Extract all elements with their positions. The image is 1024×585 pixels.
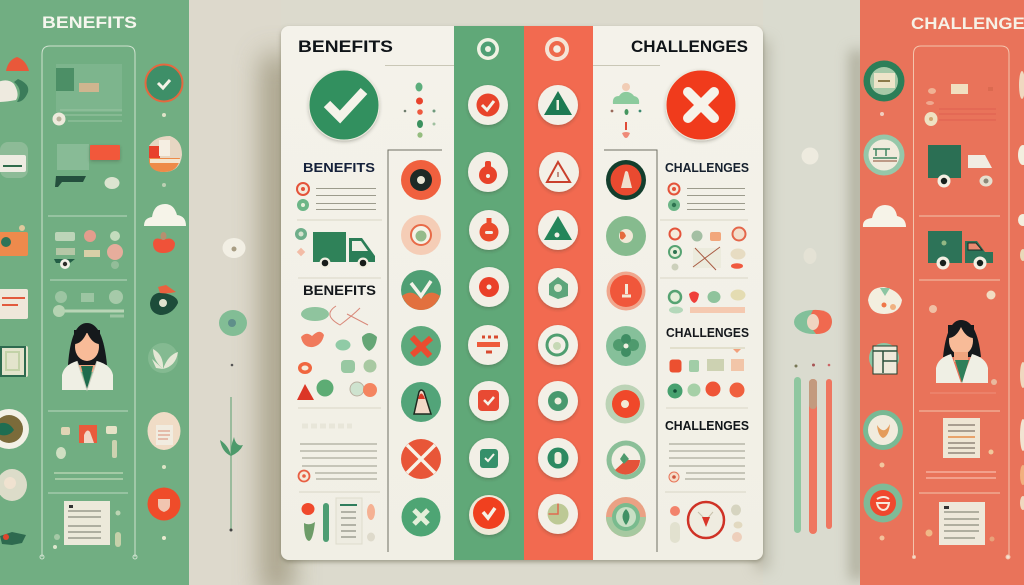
dot — [802, 148, 818, 164]
heading: main challenges: CHALLENGES — [631, 37, 748, 56]
icon: cream blob — [868, 287, 902, 314]
icon: red check box — [469, 381, 509, 421]
icon: mint orange — [606, 216, 646, 256]
left frame section 4 — [54, 425, 123, 479]
icon: mint flower — [606, 326, 646, 366]
icon: pie mint — [606, 440, 646, 480]
icon: apple — [153, 232, 175, 253]
icon: red key — [468, 152, 508, 192]
icon: green triangle — [538, 210, 578, 250]
icon: peach document — [148, 412, 180, 450]
small mark — [804, 248, 816, 264]
icon: leaf target — [606, 497, 646, 537]
document left — [53, 501, 121, 549]
icon: red white X — [401, 439, 441, 479]
heading: benefits 2: BENEFITS — [303, 160, 375, 175]
icon: green swirl X — [402, 498, 440, 536]
icon: green red cross — [401, 326, 441, 366]
icon: red equals — [468, 325, 508, 365]
icon: green check orange — [401, 270, 441, 310]
heading: left benefits: BENEFITS — [42, 13, 137, 32]
heading: challenges 4: CHALLENGES — [665, 418, 749, 433]
left frame section 2 — [54, 230, 123, 269]
mini dots: benefits — [404, 82, 436, 138]
strip: green column — [454, 26, 524, 560]
heading: challenges 3: CHALLENGES — [666, 325, 749, 340]
panel: left green background panel — [0, 0, 189, 585]
panel: right red background panel — [860, 0, 1024, 585]
icon: orange ring check — [146, 64, 182, 102]
plant — [220, 364, 243, 532]
clock and minis — [670, 502, 742, 543]
document right top — [926, 418, 996, 478]
icon: green ring — [538, 438, 578, 478]
frame: right panel outline — [912, 46, 1010, 559]
right edge cropped items — [1018, 71, 1024, 510]
icon: peach badge — [149, 136, 182, 172]
icon: big X — [666, 70, 736, 140]
icon: green swirl — [538, 325, 578, 365]
decorations: left gap — [219, 238, 247, 532]
icon: mint table — [864, 134, 904, 176]
mint blob — [219, 310, 247, 336]
icon: green card circle — [864, 60, 904, 102]
truck illustration — [295, 228, 375, 268]
list items — [668, 184, 745, 211]
icon: green warning — [538, 85, 578, 125]
column: red strip icons — [538, 37, 579, 534]
icon: green pentagon — [538, 268, 578, 308]
left frame section 3 — [53, 290, 124, 317]
icon: green cone — [401, 382, 441, 422]
sub-panel: card right challenges list — [665, 160, 749, 543]
icon grid with X — [669, 228, 746, 270]
column: green strip icons — [468, 38, 509, 535]
woman illustration right — [929, 290, 997, 393]
icon: red mint flower — [606, 384, 644, 424]
green red blob — [794, 310, 832, 334]
icon: mint cream — [863, 410, 903, 450]
icon: small ring red — [545, 37, 569, 61]
right column icons — [863, 60, 906, 540]
panel: central card — [281, 26, 763, 560]
heading: challenges 2: CHALLENGES — [665, 160, 749, 175]
icon: dark blob — [150, 285, 178, 315]
icon: mint red — [864, 484, 902, 522]
sub-panel: card left benefits list — [295, 160, 377, 544]
heading: benefits 3: BENEFITS — [303, 283, 376, 298]
vertical bars — [794, 364, 832, 534]
column: icons left of green strip — [401, 160, 441, 536]
list items — [297, 183, 376, 211]
icon: green check box — [469, 438, 509, 478]
mini cloud: challenges — [611, 83, 641, 138]
icon: map pie — [538, 494, 578, 534]
document right bottom — [926, 502, 994, 545]
icon: red shield — [148, 488, 180, 520]
bottom mini items — [302, 498, 375, 544]
icon: orange dark target — [401, 160, 441, 200]
icon: small ring green — [477, 38, 499, 60]
frame: left panel outline — [40, 46, 137, 559]
icon: red warning outline — [539, 152, 579, 192]
icon: leaves — [148, 343, 178, 373]
icon grid — [297, 306, 377, 400]
icon: cloud right — [863, 205, 906, 227]
left edge cropped icons — [0, 57, 29, 545]
icon: dark ring warning — [606, 160, 646, 200]
section frame lines — [297, 66, 748, 552]
left frame section 1 — [52, 64, 122, 189]
icon: cloud — [144, 204, 186, 226]
icon: red check — [468, 85, 508, 125]
decorations: right gap — [794, 148, 832, 534]
faded text rows — [298, 426, 377, 482]
icon: red heart check — [469, 495, 509, 535]
icon: big check — [309, 70, 379, 140]
icon rows — [668, 348, 745, 398]
left column icons (right side) — [144, 64, 186, 540]
icon: red dot — [469, 267, 509, 307]
icon: green donut — [538, 381, 578, 421]
heading: main benefits: BENEFITS — [298, 37, 393, 56]
woman illustration left — [62, 323, 113, 390]
strip: red column — [524, 26, 593, 560]
right frame section 1 — [924, 84, 996, 126]
text rows — [669, 444, 745, 482]
icon: peach target — [401, 215, 441, 255]
icon: frame shelf — [869, 343, 899, 374]
icon: red badge — [606, 272, 646, 310]
dot — [222, 238, 246, 258]
icon row with bar — [669, 290, 746, 314]
icon: red bulb — [469, 210, 509, 250]
truck illustration 2 — [928, 231, 993, 270]
column: icons right of red strip — [606, 160, 646, 537]
truck illustration 1 — [928, 145, 992, 188]
